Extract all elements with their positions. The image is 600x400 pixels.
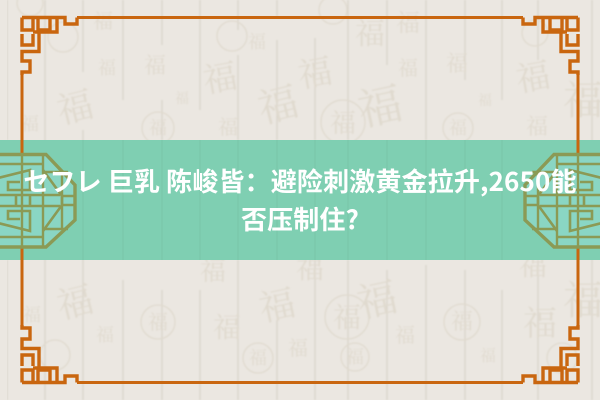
watermark pattern: 福	[93, 5, 113, 34]
watermark pattern: 福	[288, 332, 308, 361]
watermark pattern: 福	[296, 247, 324, 287]
watermark pattern: 福	[51, 271, 98, 330]
watermark pattern: 福	[346, 343, 364, 369]
corner: top left	[22, 18, 77, 75]
watermark pattern: 福	[395, 319, 415, 348]
watermark pattern: 福	[249, 344, 267, 370]
watermark pattern: 福	[175, 88, 189, 108]
green band	[0, 140, 600, 260]
watermark pattern: 福	[480, 343, 496, 366]
watermark pattern: 福	[248, 28, 266, 54]
watermark pattern: 福	[98, 54, 116, 80]
corner: bottom left	[22, 325, 77, 382]
watermark pattern: 福	[396, 3, 420, 38]
watermark pattern: 福	[294, 43, 336, 98]
watermark pattern: 福	[21, 110, 39, 136]
watermark pattern: 福	[199, 48, 241, 103]
title: 否压制住?	[241, 200, 359, 237]
watermark pattern: 福	[451, 305, 473, 336]
watermark pattern: 福	[251, 70, 304, 135]
ornament: left lattice octagon	[0, 154, 75, 247]
watermark pattern: 福	[23, 301, 41, 327]
watermark pattern: 福	[96, 321, 114, 347]
watermark pattern: 福	[218, 111, 238, 140]
watermark pattern: 福	[351, 266, 402, 330]
watermark pattern: 福	[144, 49, 166, 80]
ornament: right lattice octagon	[525, 154, 600, 247]
watermark pattern: 福	[526, 110, 548, 141]
watermark pattern: 福	[446, 47, 468, 78]
watermark pattern: 福	[254, 275, 300, 332]
watermark pattern: 福	[330, 103, 356, 140]
watermark pattern: 福	[512, 47, 554, 102]
watermark pattern: 福	[351, 67, 407, 139]
watermark pattern: 福	[478, 90, 492, 110]
watermark pattern: 福	[398, 52, 418, 81]
corner: bottom right	[523, 325, 578, 382]
watermark pattern: 福	[213, 306, 241, 346]
watermark pattern: 福	[200, 251, 226, 288]
watermark pattern: 福	[355, 9, 385, 53]
watermark pattern: 福	[333, 296, 361, 336]
watermark pattern: 福	[449, 114, 467, 140]
title	[23, 162, 577, 237]
title: セフレ 巨乳 陈峻皆：避险刺激黄金拉升,2650能	[23, 162, 577, 199]
watermark pattern: 福	[149, 114, 167, 140]
corner: top right	[523, 18, 578, 75]
watermark pattern: 福	[51, 76, 98, 135]
watermark pattern: 福	[523, 296, 557, 345]
watermark pattern: 福	[519, 244, 547, 284]
watermark pattern: 福	[148, 306, 168, 335]
